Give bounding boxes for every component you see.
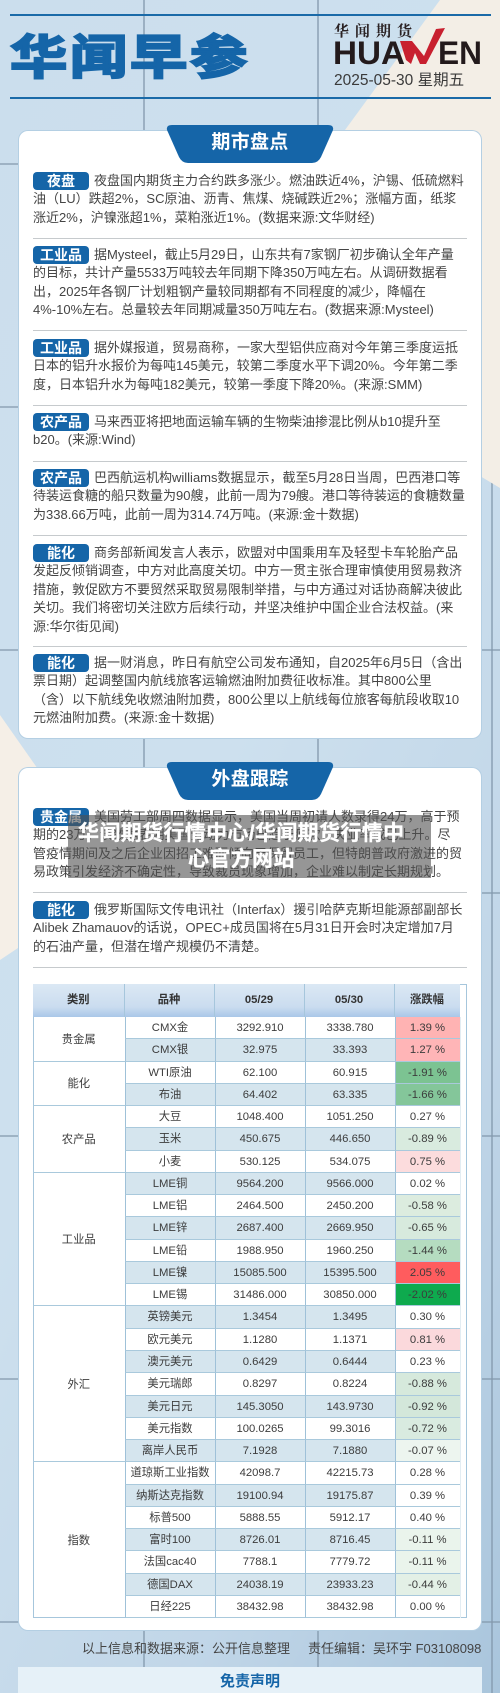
table rows: 42215.73	[326, 1467, 374, 1479]
table rows: 0.6429	[243, 1356, 277, 1368]
news: 能化 OPEC	[33, 901, 462, 954]
news: 工业品 steel: 工业品	[40, 247, 82, 263]
table rows: 9564.200	[236, 1178, 284, 1190]
table rows: 1048.400	[236, 1111, 284, 1123]
panel: 期市盘点 market review	[19, 131, 481, 738]
category column: 指数	[67, 1535, 90, 1547]
table rows: 0.8297	[243, 1378, 277, 1390]
news: 夜盘: 夜盘	[47, 173, 75, 189]
table rows: 3292.910	[236, 1022, 284, 1034]
news: 贵金属: 易政策引发经济不确定性，导致裁员现象增加，企业难以制定长期规划。	[33, 864, 449, 879]
watermark overlay	[68, 815, 431, 878]
news: 工业品 aluminium: 度，日本铝升水为每吨182美元，较第一季度下降20%。(来源:SMM)	[33, 377, 422, 392]
table rows: 2450.200	[326, 1200, 374, 1212]
table rows: 澳元美元	[147, 1356, 193, 1368]
table rows: 富时100	[149, 1534, 191, 1546]
table rows: 143.9730	[326, 1401, 374, 1413]
table rows: 32.975	[243, 1044, 277, 1056]
table rows: 0.8224	[333, 1378, 367, 1390]
table rows: -0.07 %	[408, 1445, 447, 1457]
table rows: -2.02 %	[408, 1289, 447, 1301]
table rows: -0.11 %	[408, 1556, 447, 1568]
table rows: 23933.23	[326, 1579, 374, 1591]
table rows: -0.11 %	[408, 1534, 447, 1546]
table rows: 美元瑞郎	[147, 1378, 193, 1390]
table rows: 100.0265	[236, 1423, 284, 1435]
footer: source credit: 以上信息和数据来源：公开信息整理	[82, 1641, 290, 1656]
table rows: 0.23 %	[410, 1356, 445, 1368]
table rows: 38432.98	[326, 1601, 374, 1613]
footer: editor credit: 责任编辑：吴环宇 F03108098	[308, 1641, 481, 1656]
table header: 类别	[67, 994, 90, 1006]
table rows: -1.91 %	[408, 1067, 447, 1079]
logo: Huawen Futures	[333, 20, 482, 70]
table rows: 0.6444	[333, 1356, 367, 1368]
table rows: 布油	[159, 1089, 181, 1101]
table rows: -1.66 %	[408, 1089, 447, 1101]
table rows: 5912.17	[330, 1512, 370, 1524]
table rows: 530.125	[240, 1156, 280, 1168]
table rows: 德国DAX	[147, 1579, 193, 1591]
table rows: -0.65 %	[408, 1222, 447, 1234]
table rows: 英镑美元	[147, 1311, 193, 1323]
table rows: 15085.500	[233, 1267, 287, 1279]
news: 农产品 biodiesel: 农产品	[40, 414, 82, 430]
news: 能化 OPEC: Alibek Zhamauov的话说，OPEC+成员国将在5月31日开会时决定增加7月	[33, 920, 454, 935]
news: 夜盘: 涨近2%，沪镍涨超1%，菜粕涨近1%。(数据来源:文华财经)	[33, 210, 375, 225]
table rows: 7788.1	[243, 1556, 277, 1568]
news: 农产品 biodiesel	[33, 413, 441, 447]
logo: Huawen Futures: HUA	[333, 35, 405, 70]
news: 夜盘	[33, 172, 464, 225]
table rows: 63.335	[333, 1089, 367, 1101]
table rows: 33.393	[333, 1044, 367, 1056]
news: 农产品 sugar	[33, 469, 465, 522]
news: 工业品 steel	[33, 246, 454, 317]
table rows: 64.402	[243, 1089, 277, 1101]
table rows: 1988.950	[236, 1245, 284, 1257]
news: 能化 tyres	[33, 544, 462, 634]
table rows: 5888.55	[240, 1512, 280, 1524]
category column: 农产品	[62, 1134, 96, 1146]
news: 工业品 aluminium: 据外媒报道，贸易商称，一家大型铝供应商对今年第三季度运抵	[94, 340, 458, 355]
heading: 期市盘点: 期市盘点	[211, 132, 289, 153]
table rows: -1.44 %	[408, 1245, 447, 1257]
category column: 贵金属	[62, 1034, 96, 1046]
watermark line 1: 华闻期货行情中心/华闻期货行情中	[78, 822, 404, 845]
news: 工业品 steel: 出，2025年各钢厂计划粗钢产量较同期都有不同程度的减少，降幅在	[33, 284, 426, 299]
panel: 外盘跟踪 overseas tracking	[19, 768, 481, 1630]
table rows: 标普500	[149, 1512, 191, 1524]
table rows: CMX银	[152, 1044, 188, 1056]
disclaimer band: 免责声明	[220, 1673, 280, 1690]
data table	[33, 984, 467, 1618]
table rows: 1.1371	[333, 1334, 367, 1346]
table rows: 纳斯达克指数	[136, 1490, 204, 1502]
table rows: LME铅	[153, 1245, 187, 1257]
table rows: WTI原油	[148, 1067, 192, 1079]
news: 能化 OPEC: 的石油产量，但潜在增产规模仍不清楚。	[33, 939, 267, 954]
news: 贵金属: 贵金属	[40, 809, 82, 825]
category column: 工业品	[62, 1234, 96, 1246]
heading: 外盘跟踪: 外盘跟踪	[211, 769, 289, 790]
news: 能化 fuel surcharge: 票日期）起调整国内航线旅客运输燃油附加费征收标准。其中800公里	[33, 673, 432, 688]
news: 工业品 aluminium: 日本的铝升水报价为每吨145美元，较第二季度水平下调20%。今年第二季	[33, 358, 458, 373]
table rows: 15395.500	[323, 1267, 377, 1279]
table rows: -0.58 %	[408, 1200, 447, 1212]
news: 工业品 steel: 的目标，共计产量5533万吨较去年同期下降350万吨左右。从调研数据看	[33, 265, 448, 280]
news: 能化 fuel surcharge: 能化	[47, 655, 75, 671]
news: 能化 tyres: 能化	[47, 545, 75, 561]
table rows: 大豆	[159, 1111, 181, 1123]
news: 农产品 sugar: 待装运食糖的船只数量为90艘，此前一周为79艘。港口等待装运的食糖数量	[33, 488, 465, 503]
table rows: 99.3016	[330, 1423, 370, 1435]
date: 2025-05-30 星期五	[334, 72, 464, 89]
table header: 涨跌幅	[410, 994, 444, 1006]
table rows: 62.100	[243, 1067, 277, 1079]
logo: Huawen Futures: EN	[438, 35, 482, 70]
table rows: 玉米	[159, 1133, 181, 1145]
table rows: 19100.94	[236, 1490, 284, 1502]
table rows: 1.3495	[333, 1311, 367, 1323]
news: 农产品 sugar: 巴西航运机构williams数据显示，截至5月28日当周，巴西港口等	[94, 470, 460, 485]
table rows: LME锌	[153, 1222, 187, 1234]
news: 贵金属: 期的23万。该数据表明美国劳动力市场已趋于疲软，失业率或已上升。尽	[33, 827, 450, 842]
table rows: 30850.000	[323, 1289, 377, 1301]
table rows	[125, 1017, 461, 1618]
table rows: 7.1928	[243, 1445, 277, 1457]
table rows: 8716.45	[330, 1534, 370, 1546]
news: 能化 OPEC: 能化	[47, 902, 75, 918]
heading: 外盘跟踪	[166, 762, 334, 800]
table rows: -0.92 %	[408, 1401, 447, 1413]
watermark line 2: 心官方网站	[188, 848, 295, 871]
table header: 05/30	[335, 994, 363, 1006]
news: 能化 tyres: 源:华尔街见闻)	[33, 619, 119, 634]
table rows: 2.05 %	[410, 1267, 445, 1279]
title: 华闻早参	[10, 20, 250, 88]
header top rule	[10, 14, 491, 16]
table rows: 美元日元	[147, 1401, 193, 1413]
table rows: 1.27 %	[410, 1044, 445, 1056]
news: 能化 tyres: 关切。我们将密切关注欧方后续行动，并坚决维护中国企业合法权益。(来	[33, 600, 453, 615]
table rows: 2669.950	[326, 1222, 374, 1234]
table header	[33, 984, 460, 1017]
news: 能化 fuel surcharge: 据一财消息，昨日有航空公司发布通知，自2025年6月5日（含出	[94, 655, 462, 670]
table rows: 0.39 %	[410, 1490, 445, 1502]
table rows: 离岸人民币	[142, 1445, 198, 1457]
table rows: 2464.500	[236, 1200, 284, 1212]
table rows: -0.72 %	[408, 1423, 447, 1435]
news: 能化 fuel surcharge: 元燃油附加费。(来源:金十数据)	[33, 710, 214, 725]
table rows: 450.675	[240, 1133, 280, 1145]
table rows: 1.3454	[243, 1311, 277, 1323]
table rows: 0.00 %	[410, 1601, 445, 1613]
table rows: 3338.780	[326, 1022, 374, 1034]
news: 工业品 steel: 4%-10%左右。总量较去年同期减量350万吨左右。(数据来源:Mysteel)	[33, 302, 434, 317]
news: 工业品 aluminium	[33, 339, 458, 392]
table rows: -0.89 %	[408, 1133, 447, 1145]
news: 夜盘: 油（LU）跌超2%，SC原油、沥青、焦煤、烧碱跌近2%；涨幅方面，纸浆	[33, 191, 456, 206]
table rows: 31486.000	[233, 1289, 287, 1301]
table rows: 19175.87	[326, 1490, 374, 1502]
table rows: 欧元美元	[147, 1334, 193, 1346]
news: 贵金属	[33, 808, 462, 879]
table rows: 24038.19	[236, 1579, 284, 1591]
news: 能化 fuel surcharge: （含）以下航线免收燃油附加费，800公里以上航线每位旅客每航段收取10	[33, 692, 459, 707]
table rows: LME铜	[153, 1178, 187, 1190]
table rows: 7.1880	[333, 1445, 367, 1457]
table rows: -0.44 %	[408, 1579, 447, 1591]
news: 能化 tyres: 发起反倾销调查，中方对此高度关切。中方一贯主张合理审慎使用贸易救济	[33, 563, 462, 578]
table rows: LME铝	[153, 1200, 187, 1212]
table rows: 0.40 %	[410, 1512, 445, 1524]
category column: 外汇	[67, 1379, 90, 1391]
table rows: 7779.72	[330, 1556, 370, 1568]
table rows: 0.02 %	[410, 1178, 445, 1190]
table rows: 美元指数	[147, 1423, 193, 1435]
news: 能化 tyres: 措施，敦促欧方不要贸然采取贸易限制举措，与中方通过对话协商解决彼此	[33, 582, 462, 597]
table header: 品种	[158, 994, 180, 1006]
table rows: 0.81 %	[410, 1334, 445, 1346]
news: 贵金属: 美国劳工部周四数据显示，美国当周初请人数录得24万，高于预	[94, 809, 459, 824]
table rows: 60.915	[333, 1067, 367, 1079]
table rows: 法国cac40	[144, 1556, 196, 1568]
table rows: 小麦	[159, 1156, 181, 1168]
news: 能化 OPEC: 俄罗斯国际文传电讯社（Interfax）援引哈萨克斯坦能源部副部长	[94, 902, 462, 917]
news: 农产品 biodiesel: 马来西亚将把地面运输车辆的生物柴油掺混比例从b10提升至	[94, 414, 441, 429]
table rows: LME镍	[153, 1267, 187, 1279]
news: 能化 tyres: 商务部新闻发言人表示，欧盟对中国乘用车及轻型卡车轮胎产品	[94, 545, 458, 560]
table rows: 42098.7	[240, 1467, 280, 1479]
category column	[34, 1033, 125, 1547]
table rows: 1.39 %	[410, 1022, 445, 1034]
table rows: 145.3050	[236, 1401, 284, 1413]
table rows: 0.30 %	[410, 1311, 445, 1323]
table rows: 1960.250	[326, 1245, 374, 1257]
news: 工业品 steel: 据Mysteel，截止5月29日，山东共有7家钢厂初步确认全年产量	[94, 247, 454, 262]
table rows: 9566.000	[326, 1178, 374, 1190]
table rows: 0.75 %	[410, 1156, 445, 1168]
news: 农产品 sugar: 农产品	[40, 470, 82, 486]
news: 能化 fuel surcharge	[33, 654, 462, 725]
table rows: 446.650	[330, 1133, 370, 1145]
header bottom rule	[10, 97, 491, 99]
table rows: 日经225	[149, 1601, 191, 1613]
table header: 05/29	[245, 994, 273, 1006]
table rows: 534.075	[330, 1156, 370, 1168]
table rows: -0.88 %	[408, 1378, 447, 1390]
table rows: CMX金	[152, 1022, 188, 1034]
table rows: 0.27 %	[410, 1111, 445, 1123]
table rows: 2687.400	[236, 1222, 284, 1234]
news: 贵金属: 管疫情期间及之后企业因招工难而倾向于保留员工，但特朗普政府激进的贸	[33, 846, 462, 861]
table rows: 1051.250	[326, 1111, 374, 1123]
category column: 能化	[67, 1078, 90, 1090]
table rows: LME锡	[153, 1289, 187, 1301]
heading: 期市盘点	[166, 125, 334, 163]
table rows: 8726.01	[240, 1534, 280, 1546]
news: 夜盘: 夜盘国内期货主力合约跌多涨少。燃油跌近4%，沪锡、低硫燃料	[94, 173, 464, 188]
table rows: 0.28 %	[410, 1467, 445, 1479]
table rows: 1.1280	[243, 1334, 277, 1346]
news: 农产品 biodiesel: b20。(来源:Wind)	[33, 432, 136, 447]
news: 工业品 aluminium: 工业品	[40, 340, 82, 356]
logo: Huawen Futures: 华闻期货	[334, 20, 418, 41]
table rows: 道琼斯工业指数	[130, 1467, 210, 1479]
disclaimer band	[18, 1667, 482, 1693]
table rows: 38432.98	[236, 1601, 284, 1613]
news: 农产品 sugar: 为338.66万吨，此前一周为314.74万吨。(来源:金十数据)	[33, 507, 359, 522]
